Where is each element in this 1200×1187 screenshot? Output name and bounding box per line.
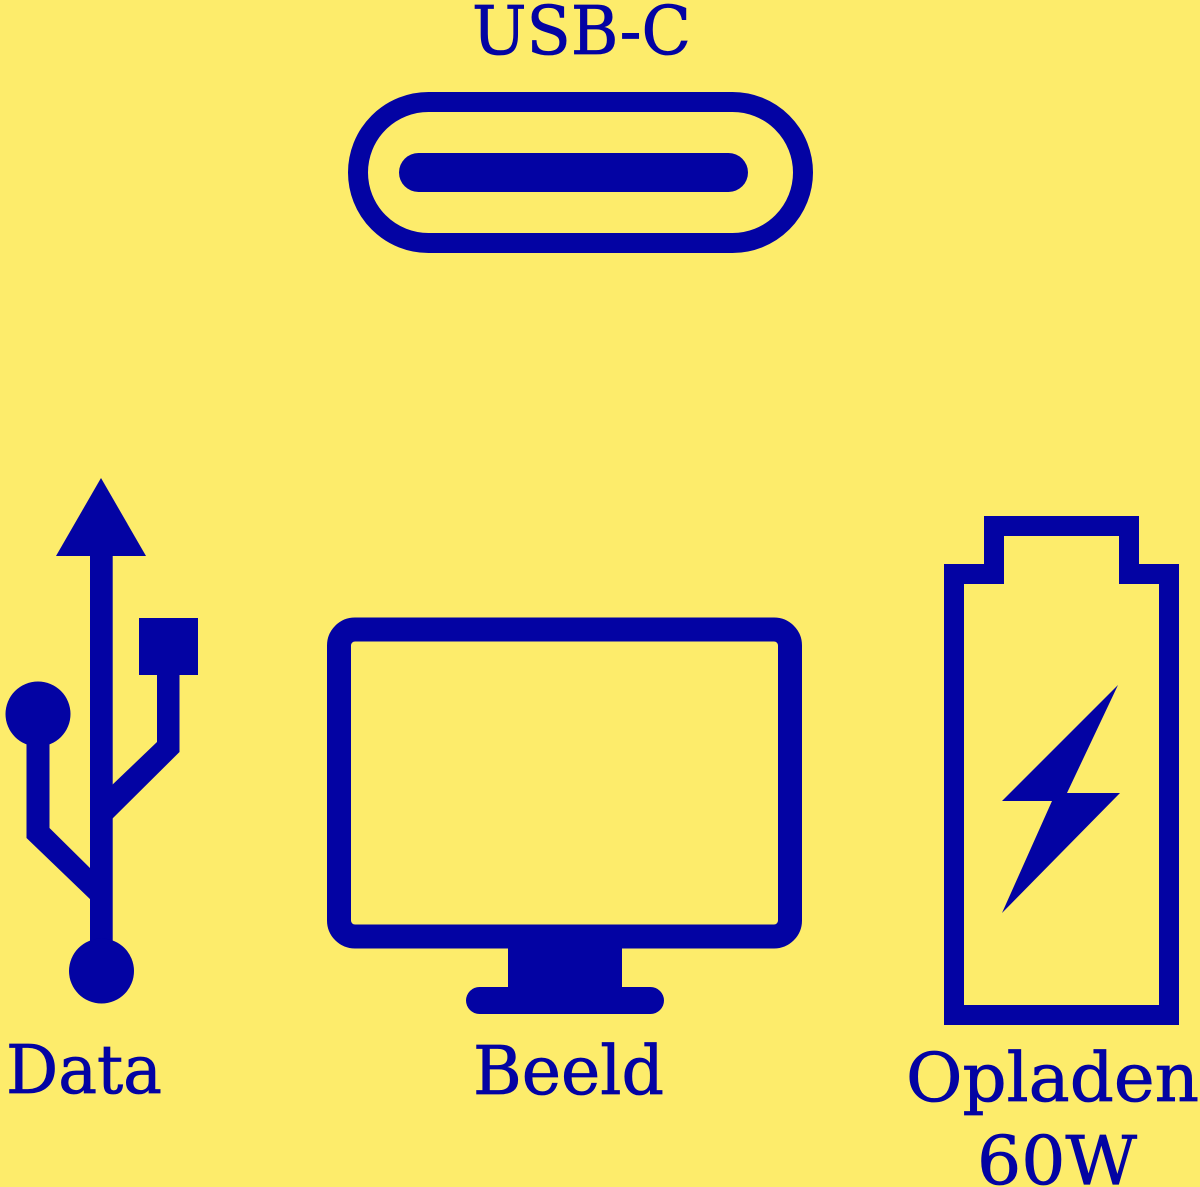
icon: monitor (339, 630, 790, 1014)
label: Data: Data (6, 1031, 162, 1109)
icon: USB-C port (358, 102, 803, 243)
label: Opladen 60W: Opladen (906, 1039, 1199, 1117)
icon: USB data symbol (6, 478, 198, 1004)
label: Opladen 60W (906, 1039, 1199, 1187)
icon: battery charging (954, 526, 1169, 1015)
label: Beeld: Beeld (473, 1032, 664, 1110)
